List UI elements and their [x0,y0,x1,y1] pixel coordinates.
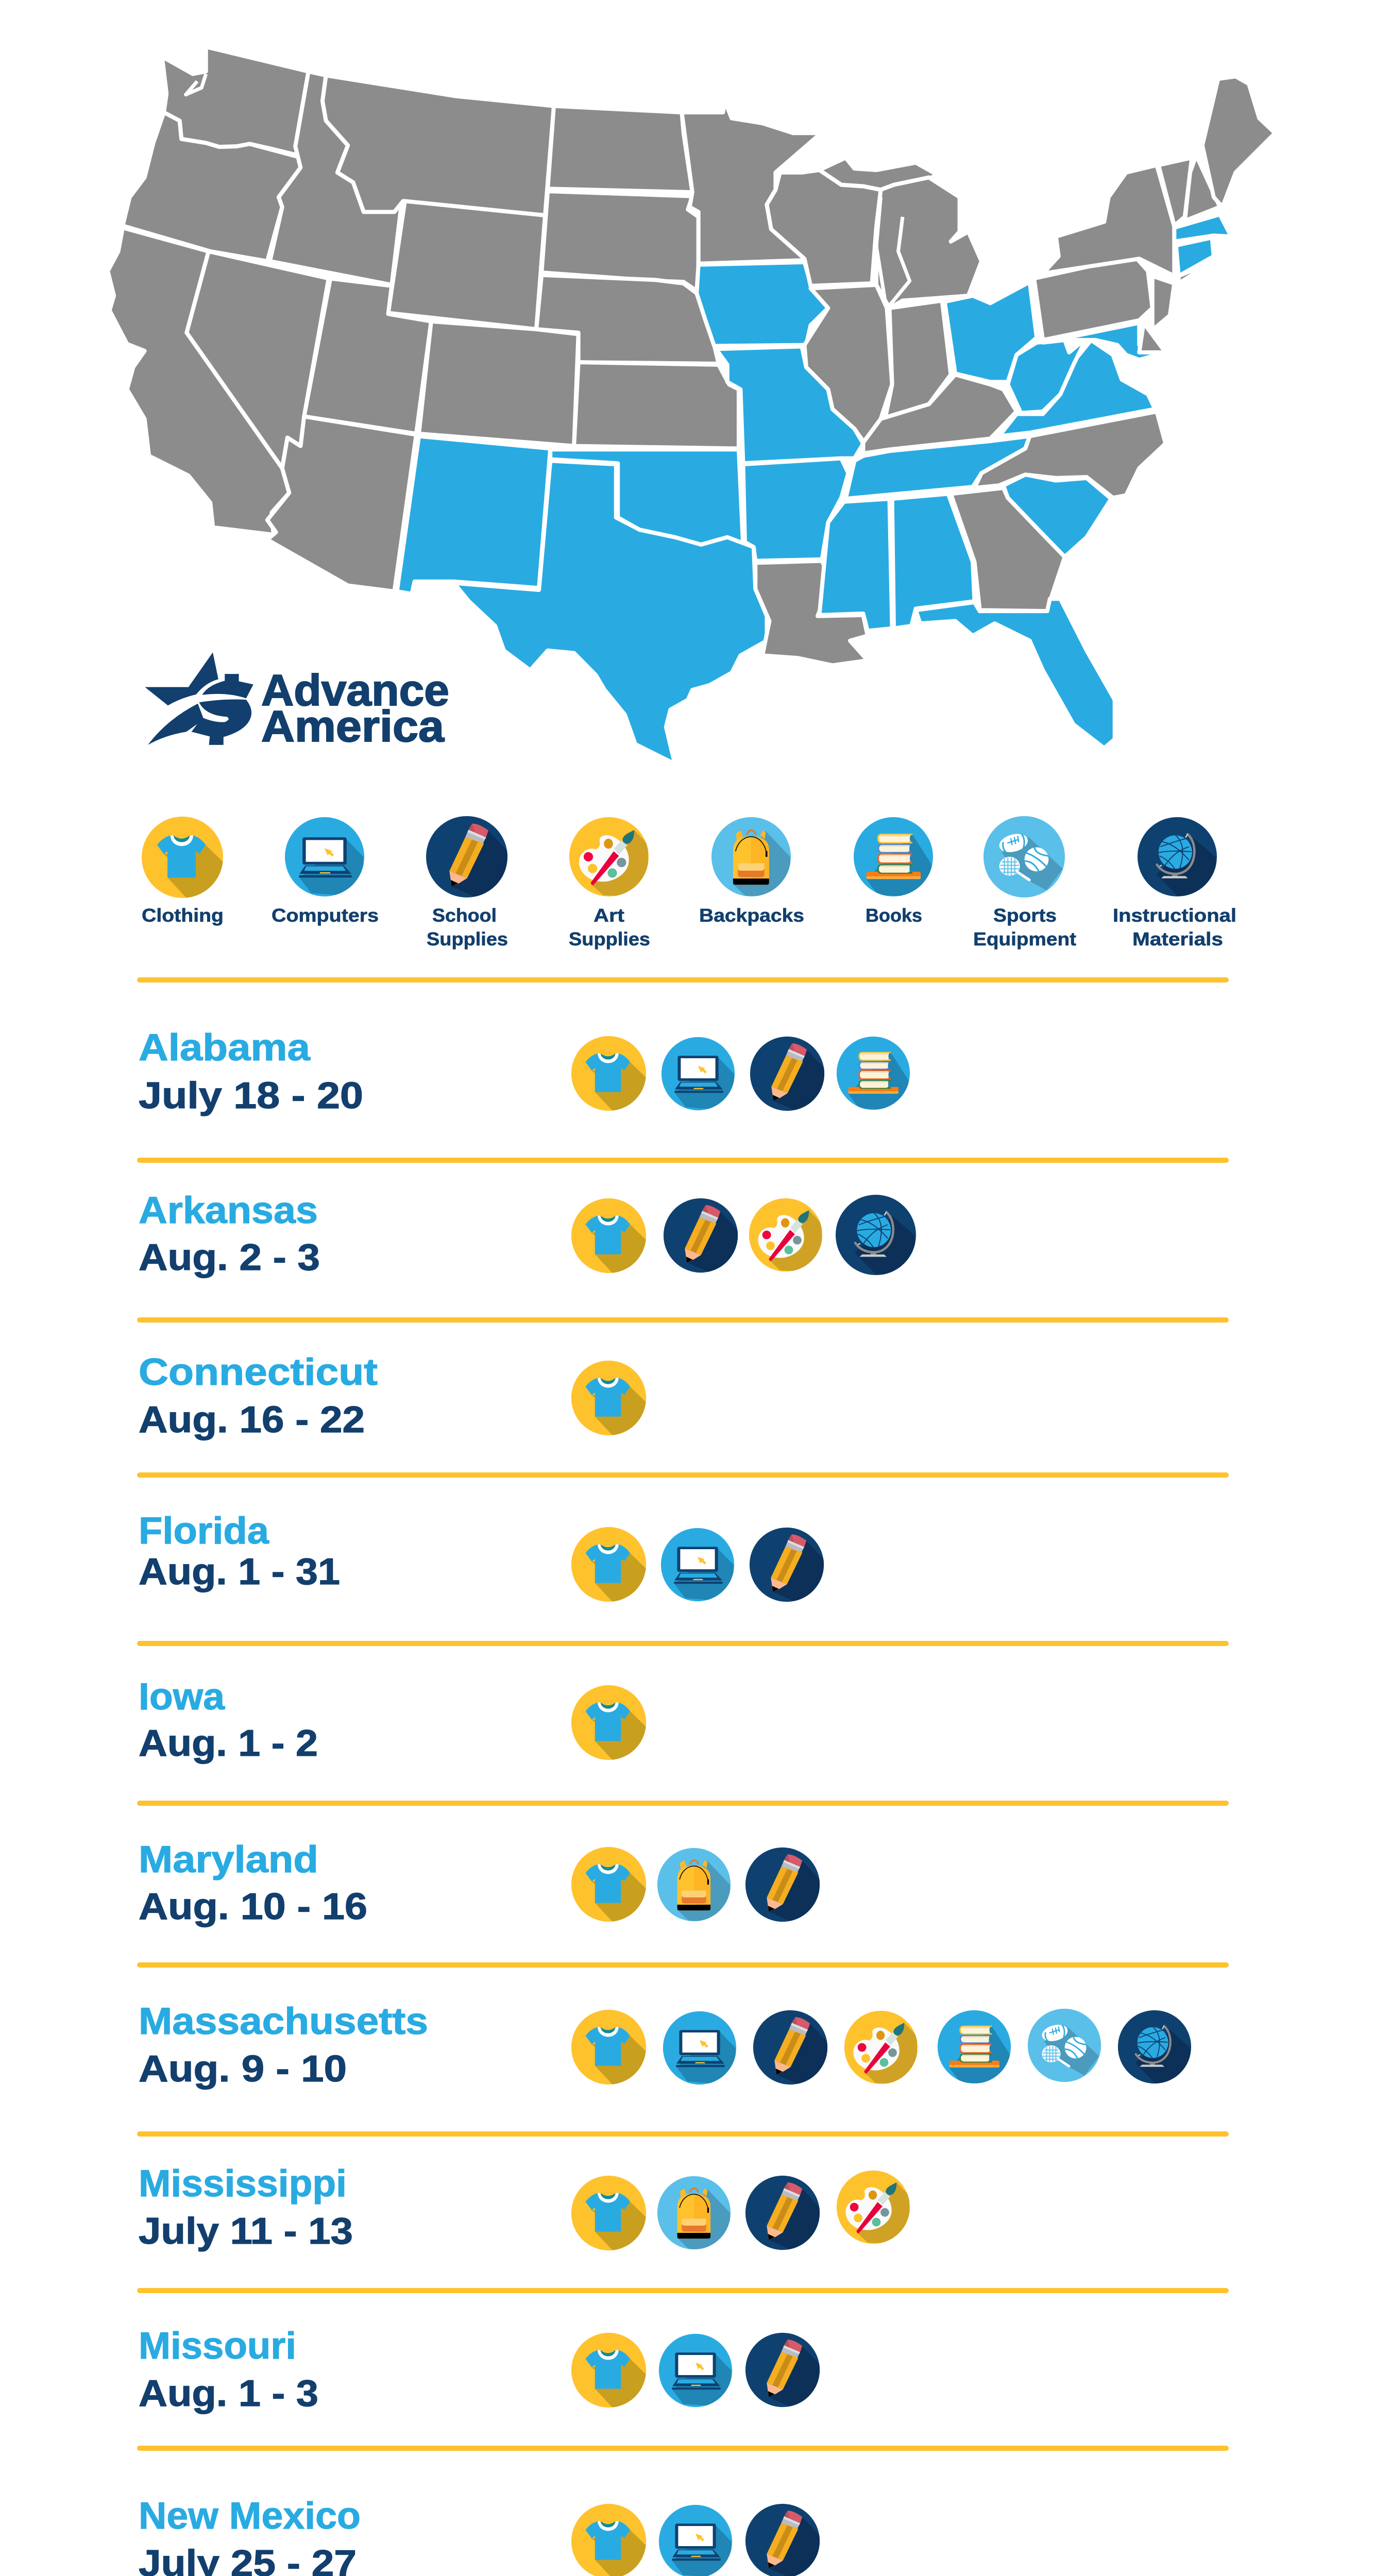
state: Tennessee [845,436,1030,499]
icon: computers [661,1037,735,1111]
icon: school supplies [745,1848,820,1922]
icon: books [938,2010,1011,2084]
state: New Mexico [397,436,550,594]
label: Sports Equipment: Equipment [973,928,1076,950]
icon: clothing [571,2333,646,2408]
icon: computers [661,1528,734,1602]
label: Clothing: Clothing [142,905,224,926]
icon: school supplies [426,816,507,898]
dates: Aug. 16 - 22 [139,1399,365,1440]
icon: clothing [571,1198,646,1274]
icon: art supplies [844,2011,918,2084]
state: Michigan lower peninsula and lake [876,177,981,308]
state name: Florida [139,1510,269,1552]
icon: clothing [571,1527,646,1602]
row: Connecticut [139,1351,646,1440]
state: Indiana [885,301,951,419]
state: Delaware [1139,323,1165,352]
state: Nevada [186,251,329,468]
state: Long Island [1179,261,1214,283]
state: Montana [323,75,554,215]
state: Missouri [716,346,863,463]
dates: Aug. 1 - 31 [139,1551,340,1592]
icon: backpacks [657,1848,731,1922]
state: Massachusetts [1174,214,1231,242]
icon: school supplies [745,2333,820,2408]
state name: Alabama [139,1027,311,1069]
icon: school supplies [664,1198,738,1273]
label: Art Supplies: Art [593,905,624,926]
row: New Mexico [139,2495,820,2576]
state: Oklahoma [550,449,743,547]
state: Oregon [123,112,300,261]
dates: Aug. 10 - 16 [139,1886,367,1927]
state: Mississippi [819,499,892,631]
icon: clothing [571,2176,646,2251]
row: Missouri [139,2325,820,2414]
state: Ohio [945,282,1037,382]
state: Texas [454,461,767,764]
icon: clothing [571,1685,646,1760]
dates: Aug. 1 - 3 [139,2373,318,2414]
icon: computers [285,817,364,897]
logo text: Advance: Advance [261,666,449,715]
state: Colorado [419,321,579,446]
icon: clothing [571,2010,646,2085]
icon: sports equipment [1028,2009,1101,2082]
state: Kansas [574,362,739,449]
state name: Connecticut [139,1351,378,1393]
label: Books: Books [866,905,922,926]
state: Minnesota [682,101,821,264]
row: Mississippi [139,2163,910,2252]
state: Georgia [951,488,1065,611]
state: Nebraska [536,275,719,364]
state: Arizona [267,416,416,591]
label: Backpacks: Backpacks [699,905,804,926]
icon: backpacks [711,817,791,897]
dates: July 11 - 13 [139,2211,353,2252]
icon: computers [663,2011,736,2085]
label: School Supplies: School [432,905,497,926]
icon: clothing [571,2504,646,2576]
state: West Virginia [1008,337,1087,413]
row: Iowa [139,1676,646,1764]
map: United States with tax-holiday states highlighted [108,47,1275,764]
label: Art Supplies: Supplies [569,928,650,950]
state: Arkansas [743,459,849,561]
state: Maine [1202,76,1275,207]
state: Iowa [697,262,828,346]
icon: school supplies [753,2010,827,2085]
row: Florida [139,1510,824,1602]
state name: Massachusetts [139,2001,428,2042]
label: Computers: Computers [272,905,379,926]
logo: Advance America [145,652,449,751]
state name: Maryland [139,1839,318,1880]
state name: Arkansas [139,1190,318,1231]
icon: backpacks [657,2176,731,2250]
state: Michigan upper peninsula [819,158,938,190]
icon: computers [659,2505,732,2576]
icon: clothing [571,1036,646,1111]
state: Alabama [892,494,975,629]
state: Maryland [1043,323,1157,360]
icon: sports equipment [983,816,1065,897]
state: Kentucky [863,375,1016,453]
dates: Aug. 2 - 3 [139,1237,320,1278]
state: Wyoming [388,201,545,329]
icon: books [837,1037,910,1110]
icon: clothing [142,817,223,899]
label: Sports Equipment: Sports [993,905,1057,926]
state: Vermont [1159,158,1192,226]
legend: tax-free item categories [142,816,1236,950]
row: Maryland [139,1839,820,1927]
state: Idaho [270,72,401,285]
state name: Mississippi [139,2163,347,2205]
state: Louisiana [755,561,868,665]
label: Instructional Materials: Instructional [1113,905,1236,926]
state: Illinois [805,285,892,441]
label: Art Supplies [569,905,650,950]
dates: Aug. 1 - 2 [139,1723,318,1764]
state: New York [1043,165,1174,276]
icon: art supplies [837,2171,910,2244]
state: Virginia [999,340,1155,436]
icon: instructional materials [1118,2010,1192,2084]
dates: Aug. 9 - 10 [139,2048,347,2090]
state: North Carolina [975,412,1165,498]
state name: Missouri [139,2325,296,2367]
logo text: America: America [261,702,445,751]
label: School Supplies: Supplies [427,928,508,950]
row: Massachusetts [139,2001,1192,2090]
icon: clothing [571,1361,646,1436]
state: Utah [304,278,431,434]
logo mark: star and dollar sign [145,652,253,745]
state: Wisconsin [767,170,881,286]
icon: school supplies [750,1037,824,1111]
state: Florida [916,599,1115,748]
dates: July 18 - 20 [139,1075,363,1116]
icon: art supplies [749,1198,823,1272]
icon: art supplies [569,817,649,897]
icon: clothing [571,1847,646,1922]
row: Alabama [139,1027,910,1116]
label: Instructional Materials [1113,905,1236,950]
icon: school supplies [745,2504,820,2576]
label: School Supplies [427,905,508,950]
state: California [108,228,289,535]
state: South Dakota [541,191,699,291]
state: North Dakota [548,106,692,192]
icon: books [854,817,934,897]
state: Pennsylvania [1034,256,1152,340]
icon: school supplies [745,2176,820,2250]
icon: instructional materials [836,1195,917,1276]
row: Arkansas [139,1190,917,1278]
label: Sports Equipment [973,905,1076,950]
label: Instructional Materials: Materials [1132,928,1223,950]
state: Washington [162,47,309,155]
state: Connecticut [1176,238,1214,276]
icon: instructional materials [1138,817,1217,897]
icon: school supplies [750,1528,824,1602]
state: New Jersey [1152,276,1174,330]
state: New Hampshire [1185,155,1220,221]
state name: New Mexico [139,2495,361,2537]
icon: computers [659,2334,732,2408]
state name: Iowa [139,1676,225,1718]
state: South Carolina [1004,474,1111,557]
